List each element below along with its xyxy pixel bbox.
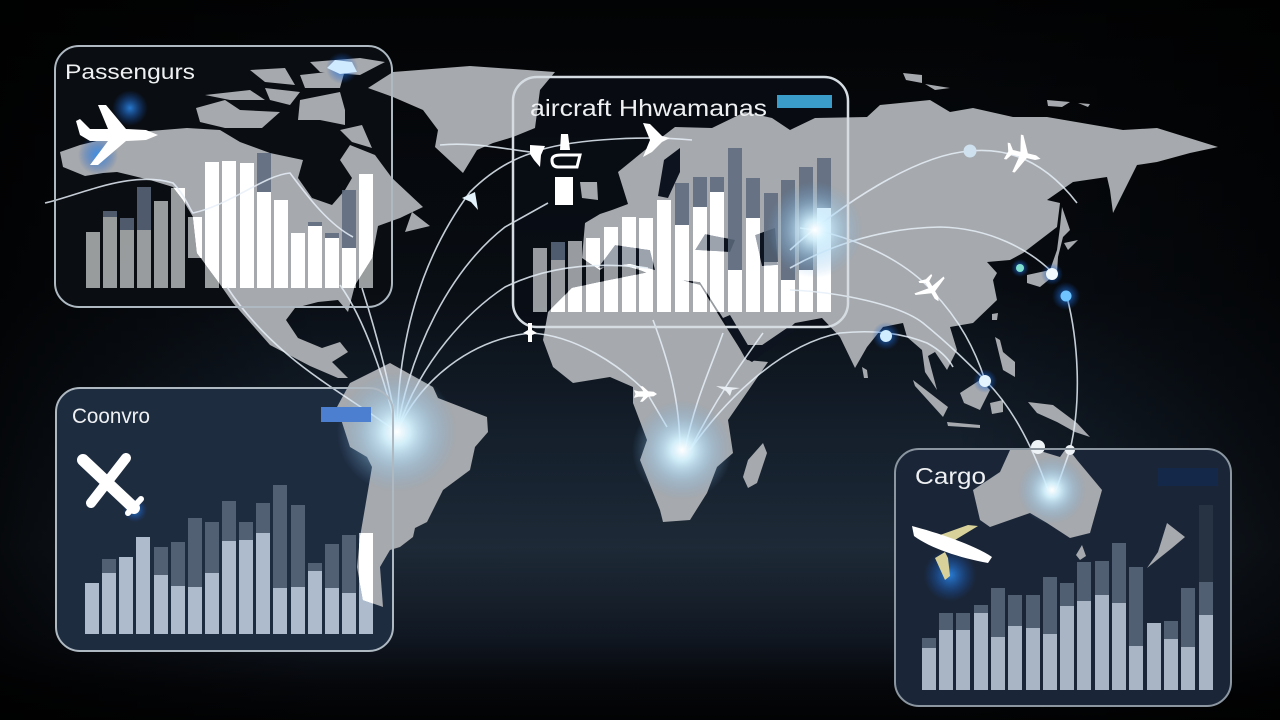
route nodes	[872, 144, 1080, 455]
panel: connections background	[56, 388, 393, 651]
glows	[78, 52, 1086, 601]
panel frame: connections	[56, 388, 393, 651]
chart: cargo bars	[922, 505, 1213, 690]
icon: passenger plane	[76, 105, 158, 165]
panel frame: cargo	[895, 449, 1231, 706]
heading: cargo: Cargo	[915, 463, 986, 489]
panel frame: aircraft movements	[513, 77, 848, 327]
map: north america	[60, 128, 423, 378]
icon: plane east asia	[1001, 132, 1045, 178]
panel: aircraft movements background	[513, 77, 848, 327]
chart: connections bars	[85, 485, 373, 634]
panel: passengers background	[55, 46, 392, 307]
chart: passengers bars	[86, 153, 373, 288]
map: australia	[973, 447, 1102, 538]
icon: connections plane	[83, 458, 141, 513]
heading: passengers: Passengurs	[65, 61, 195, 84]
flight routes	[45, 138, 1077, 490]
icon: plane china	[910, 269, 953, 310]
map: arctic islands	[196, 58, 430, 232]
panel: cargo background	[895, 449, 1231, 706]
panel frame: passengers	[55, 46, 392, 307]
icon: small plane left	[530, 145, 545, 167]
map: greenland	[368, 66, 555, 173]
world map	[60, 58, 1218, 607]
badge: aircraft movements	[777, 95, 832, 108]
map: south america	[337, 363, 488, 607]
icon: plane east africa	[716, 386, 740, 396]
icon: plane over atlantic	[462, 192, 478, 210]
icon: plane west africa	[523, 323, 537, 342]
icon: cargo plane	[912, 525, 992, 580]
map: islands	[580, 73, 1185, 568]
heading: aircraft movements: aircraft Hhwamanas	[530, 95, 767, 121]
icon: movements plane	[643, 123, 670, 157]
badge: cargo	[1158, 468, 1218, 486]
inland seas	[598, 148, 795, 362]
map: africa	[543, 272, 768, 522]
chart: aircraft movements bars	[533, 148, 831, 312]
icon: plane arctic	[327, 60, 357, 74]
heading: connections: Coonvro	[72, 405, 150, 428]
map: eurasia	[582, 100, 1218, 390]
icon: control tower	[552, 134, 580, 205]
icon: plane africa	[634, 386, 657, 402]
badge: connections	[321, 407, 371, 422]
